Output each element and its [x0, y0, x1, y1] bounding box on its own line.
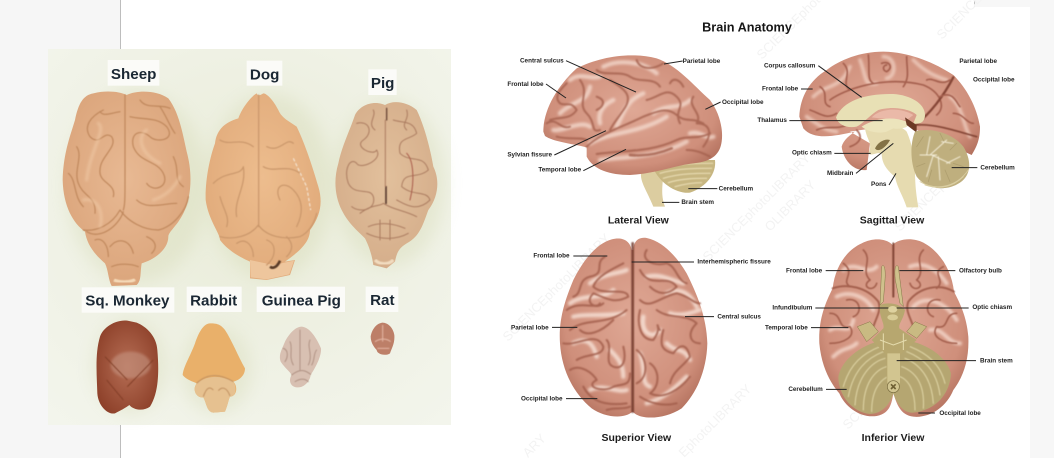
- label: Sheep: Sheep: [111, 66, 156, 83]
- lateral labels: Occipital lobe: [722, 99, 764, 106]
- inferior labels: Temporal lobe: [765, 324, 808, 331]
- sagittal labels: Midbrain: [827, 170, 853, 177]
- watermarks: SCIENCEphoto: [892, 160, 966, 234]
- watermarks: SCIENCEphotoLIBRARY: [500, 230, 613, 344]
- label: Sheep: [108, 60, 159, 86]
- lateral labels: Brain stem: [681, 199, 714, 206]
- sagittal labels: [757, 58, 1015, 188]
- label: Pig: Pig: [371, 75, 394, 92]
- sagittal labels: Thalamus: [757, 117, 787, 124]
- photo shadows: [67, 90, 445, 413]
- inferior labels: Cerebellum: [788, 386, 823, 393]
- panel: inferior view: [765, 239, 1013, 444]
- title: Brain Anatomy: Brain Anatomy: [702, 20, 792, 34]
- inferior labels: Brain stem: [980, 357, 1013, 364]
- sagittal labels: Frontal lobe: [762, 86, 799, 93]
- superior labels: Central sulcus: [717, 314, 761, 321]
- lateral labels: Frontal lobe: [507, 81, 544, 88]
- brain: pig: [335, 102, 437, 268]
- brain: rabbit: [183, 323, 245, 413]
- inferior labels: Optic chiasm: [972, 304, 1012, 311]
- inferior brain stem and olfactory tracts: [857, 265, 927, 393]
- superior brain: [560, 238, 707, 418]
- sagittal corpus callosum: [836, 94, 925, 133]
- superior labels: Interhemispheric fissure: [697, 259, 771, 266]
- inferior cerebellum: [838, 340, 951, 414]
- superior labels: Occipital lobe: [521, 395, 563, 402]
- lateral labels: Central sulcus: [520, 57, 564, 64]
- brain: dog: [206, 93, 321, 280]
- label: Guinea Pig: [257, 287, 345, 312]
- watermarks: OLIBRARY: [762, 177, 819, 234]
- sagittal brain stem: [865, 125, 918, 207]
- superior caption: Superior View: [601, 433, 672, 444]
- lateral cerebellum: [653, 160, 715, 193]
- superior leaders: [552, 256, 714, 399]
- lateral labels: [507, 57, 764, 206]
- label: Rat: Rat: [370, 292, 395, 309]
- background: right gray margin: [974, 0, 1054, 458]
- inferior labels: Olfactory bulb: [959, 267, 1002, 274]
- sagittal labels: Corpus callosum: [764, 63, 816, 70]
- superior labels: [511, 253, 771, 402]
- sagittal labels: Optic chiasm: [792, 150, 832, 157]
- label: Sq. Monkey: [82, 287, 174, 313]
- label: Rabbit: [187, 287, 242, 312]
- brain: rat: [371, 323, 394, 355]
- label: Sq. Monkey: Sq. Monkey: [85, 293, 170, 310]
- panel: photo of mammal brains: [48, 49, 451, 425]
- sagittal caption: Sagittal View: [860, 215, 925, 226]
- watermarks: [500, 0, 985, 458]
- sagittal cerebellum: [911, 130, 969, 188]
- panel: lateral view: [507, 55, 764, 226]
- inferior caption: Inferior View: [862, 433, 925, 444]
- label: Pig: [368, 69, 397, 95]
- sagittal labels: Pons: [871, 181, 887, 188]
- inferior labels: Frontal lobe: [786, 267, 823, 274]
- label: Guinea Pig: Guinea Pig: [262, 292, 341, 309]
- lateral labels: Cerebellum: [719, 185, 754, 192]
- panel: sagittal view: [757, 52, 1015, 226]
- background: left gray margin: [0, 0, 120, 458]
- sagittal cerebrum: [799, 52, 980, 170]
- superior labels: Frontal lobe: [533, 253, 570, 260]
- lateral cerebrum: [543, 55, 722, 175]
- label: Dog: [247, 61, 282, 86]
- watermarks: SCIENCEphotoLIBRARY: [700, 150, 813, 264]
- inferior leaders: [811, 271, 976, 413]
- lateral labels: Temporal lobe: [538, 166, 582, 173]
- lateral caption: Lateral View: [608, 215, 670, 226]
- lateral brain stem: [641, 170, 665, 207]
- lateral leaders: [546, 61, 721, 202]
- brain: squirrel monkey: [97, 321, 158, 414]
- lateral labels: Sylvian fissure: [507, 152, 552, 159]
- watermarks: SCIENCE: [840, 380, 891, 432]
- panel: superior view: [511, 238, 771, 444]
- label: Rat: [366, 287, 398, 312]
- sagittal labels: Cerebellum: [980, 164, 1015, 171]
- inferior labels: Occipital lobe: [939, 410, 981, 417]
- brain: guinea pig: [280, 327, 321, 387]
- sagittal labels: Occipital lobe: [973, 76, 1015, 83]
- watermarks: EphotoLIBRARY: [676, 381, 755, 458]
- inferior labels: Infundibulum: [772, 304, 813, 311]
- inferior cerebrum: [819, 239, 968, 417]
- superior labels: Parietal lobe: [511, 324, 549, 331]
- lateral labels: Parietal lobe: [683, 58, 721, 65]
- label: Rabbit: Rabbit: [190, 292, 237, 309]
- label: Dog: Dog: [250, 66, 279, 83]
- brain: sheep: [63, 92, 190, 286]
- inferior labels: [765, 267, 1013, 417]
- sagittal labels: Parietal lobe: [959, 58, 997, 65]
- sagittal leaders: [789, 66, 977, 185]
